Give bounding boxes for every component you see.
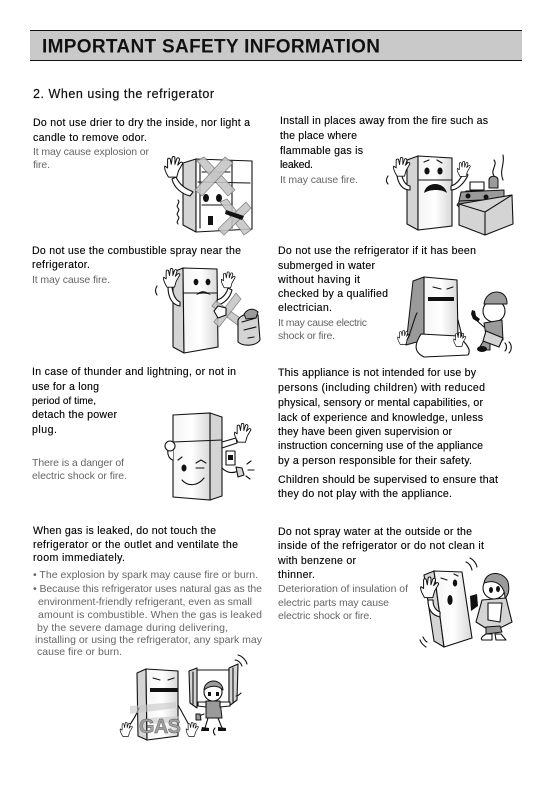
icon: worried fridge near gas stove: [386, 155, 513, 235]
text block: flammable gas warning: the place where: [280, 130, 357, 142]
text block: water spray warning: electric parts may cause: [278, 597, 389, 609]
text block: gas leak warning: When gas is leaked, do not touch the: [33, 525, 216, 537]
text block: gas leak warning: • Because this refrigerator uses natural gas as the: [33, 583, 262, 595]
text block: supervision notice: they have been given supervision or: [278, 426, 452, 438]
text block: gas leak warning: by the severe damage during delivering,: [37, 622, 228, 634]
text block: supervision notice: [278, 367, 498, 500]
text block: gas leak warning: [33, 525, 263, 658]
text block: flammable gas warning: leaked.: [280, 159, 313, 171]
icon: fridge refusing combustible spray can: [156, 268, 260, 353]
text block: drier and candle warning: fire.: [33, 159, 50, 171]
text block: combustible spray warning: Do not use the combustible spray near the: [32, 245, 241, 257]
text block: gas leak warning: • The explosion by spark may cause fire or burn.: [33, 569, 258, 581]
text block: flammable gas warning: Install in places away from the fire such as: [280, 115, 488, 127]
text block: thunder and lightning warning: detach the power: [32, 409, 117, 421]
section heading: 2. When using the refrigerator: [33, 87, 214, 101]
text block: water spray warning: inside of the refrigerator or do not clean it: [278, 540, 484, 552]
icon: smiling fridge with unplugged cord: [165, 413, 254, 500]
header banner: [30, 30, 522, 61]
text block: water spray warning: Do not spray water at the outside or the: [278, 526, 472, 538]
text block: thunder and lightning warning: period of time,: [32, 396, 96, 407]
text block: combustible spray warning: refrigerator.: [32, 259, 90, 271]
text block: combustible spray warning: It may cause fire.: [32, 274, 110, 286]
text block: supervision notice: persons (including children) with reduced: [278, 382, 485, 394]
text block: supervision notice: physical, sensory or mental capabilities, or: [278, 397, 483, 409]
text block: drier and candle warning: Do not use drier to dry the inside, nor light a: [33, 117, 250, 129]
text block: supervision notice: lack of experience and knowledge, unless: [278, 412, 483, 424]
text block: water spray warning: [277, 526, 484, 622]
text block: gas leak warning: installing or using the refrigerator, any spark may: [35, 634, 263, 646]
text block: submerged fridge warning: without having it: [277, 274, 360, 286]
text block: thunder and lightning warning: There is a danger of: [32, 457, 124, 469]
text block: thunder and lightning warning: plug.: [32, 424, 57, 436]
text block: flammable gas warning: It may cause fire.: [280, 174, 358, 186]
text block: gas leak warning: amount is combustible. When the gas is leaked: [38, 609, 262, 621]
title: IMPORTANT SAFETY INFORMATION: [42, 36, 380, 58]
text block: flammable gas warning: flammable gas is: [280, 145, 363, 157]
text block: flammable gas warning: [280, 115, 488, 186]
text block: supervision notice: instruction concerning use of the appliance: [278, 440, 483, 452]
text block: water spray warning: Deterioration of insulation of: [278, 583, 408, 595]
text block: gas leak warning: refrigerator or the outlet and ventilate the: [33, 539, 238, 551]
text block: drier and candle warning: candle to remove odor.: [33, 132, 147, 144]
icon: fridge refusing girl spraying water: [420, 558, 512, 647]
icon: flooded fridge with repairman: [398, 277, 511, 357]
text block: supervision notice: This appliance is not intended for use by: [278, 367, 477, 379]
text block: supervision notice: Children should be supervised to ensure that: [278, 474, 498, 486]
text block: gas leak warning: cause fire or burn.: [37, 646, 122, 658]
text block: submerged fridge warning: submerged in water: [278, 260, 375, 272]
text block: drier and candle warning: It may cause explosion or: [33, 146, 150, 158]
text block: submerged fridge warning: electrician.: [278, 302, 332, 314]
icon: open fridge with crossed-out candle and drier: [165, 156, 252, 235]
text block: supervision notice: by a person responsible for their safety.: [278, 455, 472, 467]
text block: water spray warning: electric shock or fire.: [278, 610, 372, 622]
text block: submerged fridge warning: [277, 245, 476, 342]
text block: submerged fridge warning: Do not use the refrigerator if it has been: [278, 245, 476, 257]
text block: water spray warning: with benzene or: [277, 555, 356, 567]
text block: submerged fridge warning: shock or fire.: [278, 330, 335, 342]
text block: gas leak warning: environment-friendly refrigerant, even as small: [38, 596, 252, 608]
text block: supervision notice: they do not play with the appliance.: [278, 488, 452, 500]
text block: submerged fridge warning: checked by a qualified: [278, 288, 388, 300]
text block: thunder and lightning warning: electric shock or fire.: [32, 470, 127, 482]
text block: water spray warning: thinner.: [278, 569, 315, 581]
text block: thunder and lightning warning: [32, 366, 236, 482]
text block: drier and candle warning: [33, 117, 250, 171]
text block: thunder and lightning warning: use for a long: [32, 381, 99, 393]
text block: gas leak warning: room immediately.: [33, 552, 125, 564]
icon: fridge leaking gas with girl opening window: [120, 655, 247, 740]
text block: thunder and lightning warning: In case of thunder and lightning, or not in: [32, 366, 236, 378]
icon: fridge leaking gas with girl opening window: GAS: [139, 716, 181, 738]
text block: combustible spray warning: [32, 245, 241, 286]
text block: submerged fridge warning: It may cause electric: [278, 317, 367, 329]
